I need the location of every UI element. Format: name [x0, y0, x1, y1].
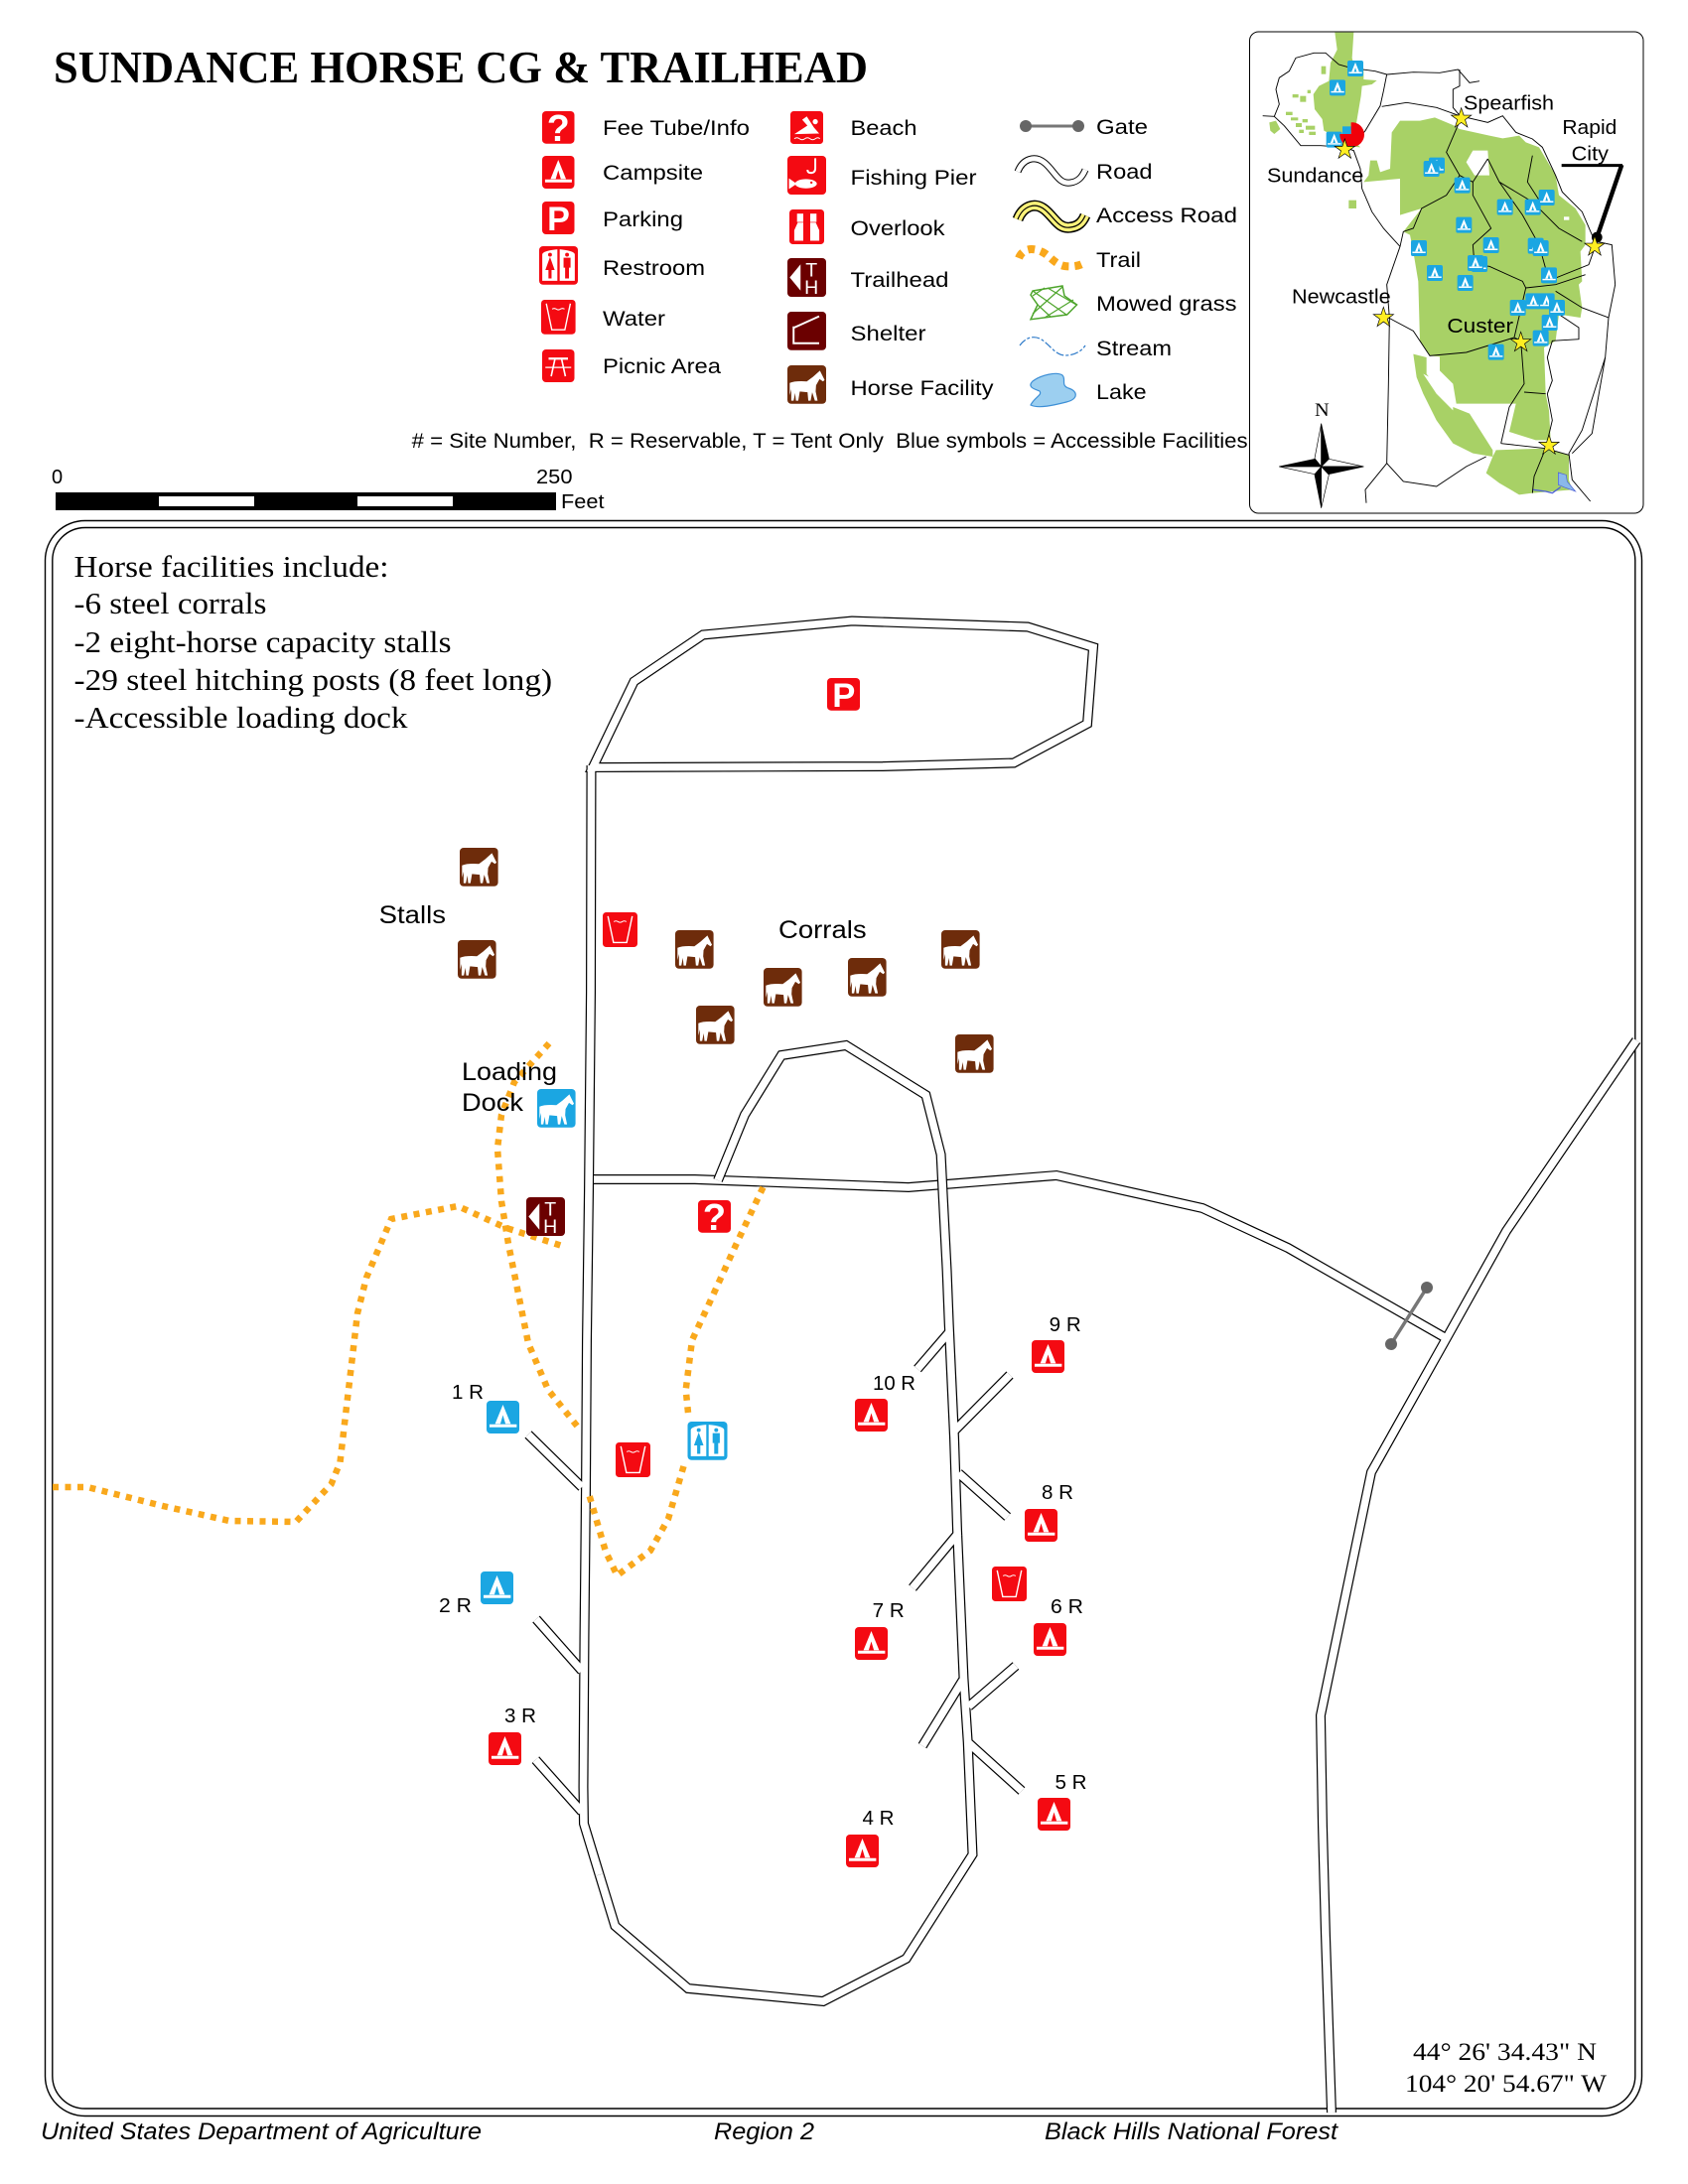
label: overlook: Overlook — [850, 217, 945, 240]
label: beach: Beach — [850, 117, 917, 140]
label: gate: Gate — [1096, 116, 1148, 139]
icon: trailhead: T — [544, 1199, 556, 1221]
coordinates: 44° 26' 34.43" N — [1413, 2039, 1597, 2066]
legend note: # = Site Number, R = Reservable, T = Tent Only Blue symbols = Accessible Facilities — [412, 430, 1248, 453]
campsite icons — [481, 1340, 1070, 1867]
icon: campsite — [542, 156, 574, 189]
symbol: access road — [1018, 205, 1085, 227]
label: mowed grass: Mowed grass — [1096, 293, 1237, 316]
icon: beach — [790, 111, 823, 144]
icon: fee tube: ? — [547, 107, 570, 149]
symbol: trail — [1019, 249, 1085, 266]
icon: trailhead: T — [805, 260, 817, 282]
site number labels: 2 R — [439, 1595, 472, 1617]
title: SUNDANCE HORSE CG & TRAILHEAD — [54, 42, 868, 92]
scale bar: Feet — [561, 491, 605, 513]
label: restroom: Restroom — [603, 257, 705, 280]
facilities note: -6 steel corrals — [73, 586, 266, 620]
icon: shelter — [787, 312, 826, 350]
facilities note: -2 eight-horse capacity stalls — [73, 624, 451, 659]
gate — [1385, 1282, 1433, 1350]
site location marker — [1339, 122, 1364, 147]
site number labels — [439, 1314, 1086, 1830]
symbol: stream — [1020, 338, 1085, 355]
site number labels: 10 R — [873, 1373, 915, 1395]
site number labels: 9 R — [1050, 1314, 1081, 1336]
scale bar — [52, 467, 605, 513]
icon: trailhead: H — [804, 277, 818, 299]
forest land — [1269, 33, 1586, 494]
label: fishing pier: Fishing Pier — [850, 167, 977, 190]
town labels: Newcastle — [1292, 287, 1391, 309]
footer — [41, 2118, 1338, 2145]
road network — [528, 621, 1636, 2113]
label: trailhead: Trailhead — [850, 269, 949, 292]
symbol: road — [1018, 159, 1085, 183]
symbol: lake — [1031, 373, 1075, 407]
site number labels: 5 R — [1055, 1772, 1086, 1794]
town labels — [1267, 93, 1617, 338]
symbol: mowed grass — [1031, 286, 1076, 320]
horse facility icons — [458, 848, 994, 1073]
callout line to rapid city — [1562, 165, 1622, 240]
facilities note: Horse facilities include: — [73, 549, 389, 584]
label: stream: Stream — [1096, 338, 1172, 360]
trails — [53, 1043, 763, 1575]
site number labels: 4 R — [862, 1808, 894, 1830]
coordinates — [1405, 2039, 1607, 2098]
label: corrals: Corrals — [778, 916, 867, 944]
panel: main map frame — [46, 520, 1642, 2116]
coordinates: 104° 20' 54.67" W — [1405, 2071, 1607, 2098]
label: road: Road — [1096, 161, 1152, 184]
icon: water north — [603, 912, 637, 947]
label: horse facility: Horse Facility — [850, 377, 994, 400]
site number labels: 6 R — [1051, 1596, 1083, 1618]
label: parking: Parking — [603, 208, 683, 231]
footer: United States Department of Agriculture — [41, 2118, 482, 2145]
facilities note — [73, 549, 552, 735]
label: picnic area: Picnic Area — [603, 355, 721, 378]
scale bar: 250 — [536, 467, 572, 488]
icon: water — [541, 300, 576, 335]
icon: trailhead: H — [543, 1216, 557, 1238]
label: fee tube: Fee Tube/Info — [603, 117, 750, 140]
icon: horse facility — [787, 365, 826, 404]
footer: Region 2 — [714, 2118, 814, 2145]
icon: picnic area — [542, 349, 574, 382]
icon: accessible loading dock — [537, 1089, 576, 1128]
compass rose: N — [1315, 400, 1330, 421]
icon: water east — [992, 1567, 1027, 1601]
icon: trailhead — [787, 258, 826, 299]
facilities note: -29 steel hitching posts (8 feet long) — [73, 662, 552, 697]
lake — [1533, 473, 1576, 493]
label: water: Water — [603, 308, 665, 331]
label: loading dock — [462, 1058, 557, 1117]
town stars — [1335, 108, 1605, 454]
label: campsite: Campsite — [603, 162, 703, 185]
label: shelter: Shelter — [850, 323, 925, 345]
icon: overlook — [789, 209, 824, 244]
town labels: Rapid — [1562, 117, 1617, 139]
label: lake: Lake — [1096, 381, 1147, 404]
label: loading dock: Loading — [462, 1058, 557, 1086]
icon: accessible restroom — [687, 1422, 727, 1460]
town labels: Custer — [1447, 316, 1513, 338]
site number labels: 8 R — [1042, 1482, 1073, 1504]
legend — [539, 107, 1237, 407]
town labels: City — [1572, 144, 1609, 166]
label: trail: Trail — [1096, 249, 1141, 272]
label: access road: Access Road — [1096, 205, 1237, 227]
road network — [1263, 53, 1616, 503]
facilities note: -Accessible loading dock — [73, 700, 408, 735]
campground icons — [1327, 61, 1565, 360]
compass rose — [1279, 400, 1363, 508]
icon: parking: P — [547, 201, 570, 238]
panel: locator inset map — [1249, 32, 1643, 513]
icon: fishing pier — [787, 156, 826, 195]
town labels: Sundance — [1267, 165, 1363, 187]
site number labels: 7 R — [873, 1600, 905, 1622]
icon: trailhead — [526, 1197, 565, 1238]
label: stalls: Stalls — [379, 901, 446, 929]
site number labels: 1 R — [452, 1382, 484, 1404]
icon: restroom — [539, 246, 578, 285]
icon: water central — [616, 1442, 650, 1477]
site number labels: 3 R — [504, 1706, 536, 1727]
icon: fee tube: ? — [703, 1197, 726, 1239]
symbol: gate — [1020, 120, 1084, 132]
scale bar: 0 — [52, 467, 63, 488]
icon: parking: P — [832, 677, 855, 715]
label: loading dock: Dock — [462, 1089, 524, 1117]
footer: Black Hills National Forest — [1045, 2118, 1338, 2145]
town labels: Spearfish — [1464, 93, 1554, 115]
